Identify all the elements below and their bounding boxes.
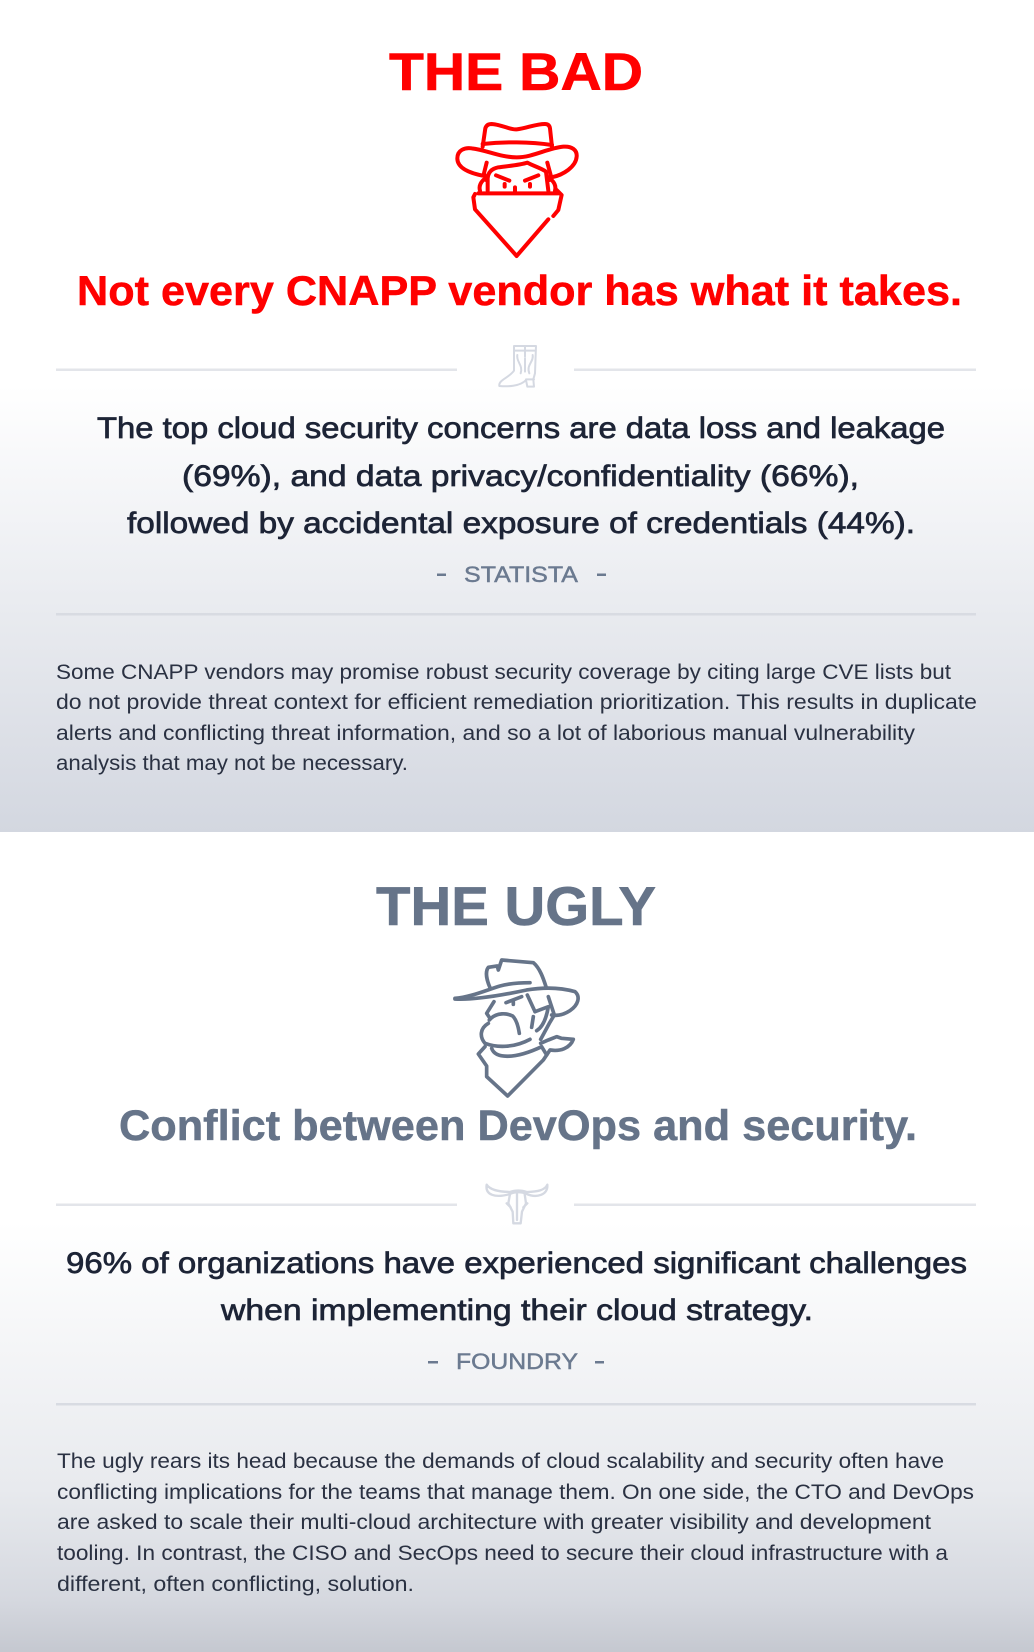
subheading: the ugly: Conflict between DevOps and security. bbox=[119, 1102, 917, 1150]
stat quote: the ugly: when implementing their cloud strategy. bbox=[220, 1294, 813, 1327]
stat quote: the bad: (69%), and data privacy/confidentiality (66%), bbox=[182, 460, 859, 493]
icon: masked bandit bbox=[457, 124, 577, 256]
body text: the ugly bbox=[57, 1449, 974, 1596]
icon: cowboy boot bbox=[499, 346, 536, 387]
stat quote: the bad: followed by accidental exposure of credentials (44%). bbox=[127, 507, 915, 540]
body text: the bad: do not provide threat context for efficient remediation prioritization. This results in duplicate bbox=[56, 690, 977, 714]
body text: the ugly: The ugly rears its head because the demands of cloud scalability and security often have bbox=[57, 1449, 944, 1473]
icon: old cowboy bbox=[455, 960, 578, 1096]
stat quote: the ugly: 96% of organizations have experienced significant challenges bbox=[66, 1247, 967, 1280]
panel: the bad bbox=[0, 43, 1034, 832]
heading: the ugly: THE UGLY bbox=[376, 875, 656, 937]
source: statista: STATISTA bbox=[464, 562, 578, 587]
body text: the bad: analysis that may not be necessary. bbox=[56, 751, 408, 775]
body text: the ugly: conflicting implications for the teams that manage them. On one side, the CTO and DevOps bbox=[57, 1480, 974, 1504]
body text: the bad: alerts and conflicting threat information, and so a lot of laborious manual vulnerability bbox=[56, 721, 915, 745]
body text: the ugly: different, often conflicting, solution. bbox=[57, 1572, 414, 1596]
stat quote: the bad: The top cloud security concerns are data loss and leakage bbox=[97, 412, 945, 445]
subheading: the bad: Not every CNAPP vendor has what it takes. bbox=[77, 267, 962, 314]
source: foundry: FOUNDRY bbox=[456, 1349, 578, 1374]
panel: the ugly bbox=[0, 875, 1034, 1652]
heading: the bad: THE BAD bbox=[389, 43, 643, 102]
icon: bull skull bbox=[486, 1185, 547, 1223]
body text: the bad bbox=[56, 660, 977, 775]
body text: the ugly: tooling. In contrast, the CISO and SecOps need to secure their cloud infrastructure with a bbox=[57, 1541, 948, 1565]
body text: the ugly: are asked to scale their multi-cloud architecture with greater visibility and development bbox=[57, 1510, 931, 1534]
stat quote: the bad bbox=[97, 412, 945, 540]
body text: the bad: Some CNAPP vendors may promise robust security coverage by citing large CVE lists but bbox=[56, 660, 951, 684]
stat quote: the ugly bbox=[66, 1247, 967, 1327]
